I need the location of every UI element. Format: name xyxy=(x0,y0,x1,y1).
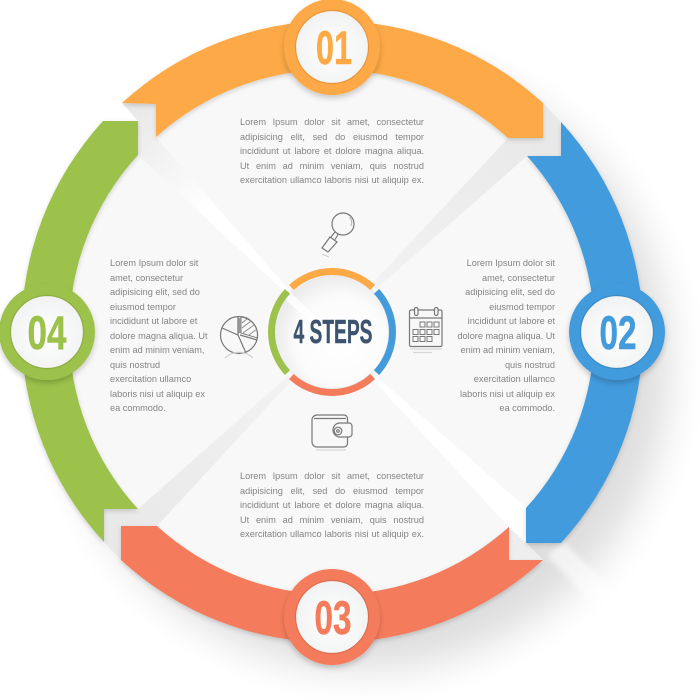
text block: step 2: enim ad minim veniam, xyxy=(461,345,555,355)
text block: step 3: Ut enim ad minim veniam, quis nostrud xyxy=(240,514,424,524)
text block: step 2: ea commodo. xyxy=(499,403,555,413)
icon: calendar xyxy=(410,308,442,352)
text block: step 3 xyxy=(240,471,424,539)
long drop shadow xyxy=(58,58,670,670)
text block: step 1: Lorem Ipsum dolor sit amet, consectetur xyxy=(240,117,424,127)
arrow segment 2: blue xyxy=(526,122,643,543)
text block: step 4: eiusmod tempor xyxy=(110,302,176,312)
badge 04: 04 xyxy=(28,306,66,359)
text block: step 1: adipisicing elit, sed do eiusmod tempor xyxy=(240,132,424,142)
text block: step 4 xyxy=(110,258,208,413)
text block: step 4: ea commodo. xyxy=(110,403,166,413)
text block: step 3: incididunt ut labore et dolore magna aliqua. xyxy=(240,500,424,510)
text block: step 2: eiusmod tempor xyxy=(489,302,555,312)
text block: step 1: Ut enim ad minim veniam, quis nostrud xyxy=(240,160,424,170)
central disc background xyxy=(69,69,595,595)
text block: step 4: adipisicing elit, sed do xyxy=(110,287,200,297)
text block: step 4: enim ad minim veniam, xyxy=(110,345,204,355)
icon: pie chart xyxy=(220,316,258,358)
badge 02: 02 xyxy=(600,306,636,359)
text block: step 1: incididunt ut labore et dolore magna aliqua. xyxy=(240,146,424,156)
arrow segment 3: red xyxy=(121,526,543,643)
badge 01: 01 xyxy=(316,21,352,74)
center circle: 4 STEPS xyxy=(294,313,372,350)
text block: step 3: adipisicing elit, sed do eiusmod tempor xyxy=(240,486,424,496)
text block: step 2: dolore magna aliqua. Ut xyxy=(457,330,555,340)
text block: step 4: exercitation ullamco xyxy=(110,374,191,384)
text block: step 2: laboris nisi ut aliquip ex xyxy=(460,388,555,398)
text block: step 1: exercitation ullamco laboris nisi ut aliquip ex. xyxy=(240,175,424,185)
arrow segment 4: green xyxy=(21,121,138,542)
badge 01 xyxy=(284,0,380,95)
badge 04 xyxy=(0,284,95,380)
center circle xyxy=(271,271,393,393)
text block: step 2: incididunt ut labore et xyxy=(468,316,555,326)
icon: magnifier xyxy=(322,213,354,257)
text block: step 2: adipisicing elit, sed do xyxy=(465,287,555,297)
text block: step 4: dolore magna aliqua. Ut xyxy=(110,330,208,340)
text block: step 4: amet, consectetur xyxy=(110,272,183,282)
text block: step 2: exercitation ullamco xyxy=(474,374,555,384)
text block: step 2 xyxy=(457,258,555,413)
text block: step 2: Lorem Ipsum dolor sit xyxy=(467,258,555,268)
text block: step 4: Lorem Ipsum dolor sit xyxy=(110,258,198,268)
text block: step 2: quis nostrud xyxy=(505,360,555,370)
text block: step 3: exercitation ullamco laboris nisi ut aliquip ex. xyxy=(240,529,424,539)
arrow segment 1: orange xyxy=(122,21,543,138)
text block: step 4: laboris nisi ut aliquip ex xyxy=(110,388,205,398)
diagonal bands xyxy=(104,103,561,560)
icon: wallet xyxy=(312,415,352,450)
text block: step 3: Lorem Ipsum dolor sit amet, consectetur xyxy=(240,471,424,481)
badge 02 xyxy=(569,284,665,380)
text block: step 2: amet, consectetur xyxy=(482,272,555,282)
text block: step 1 xyxy=(240,117,424,185)
badge 03 xyxy=(284,569,380,665)
text block: step 4: quis nostrud xyxy=(110,360,160,370)
badge 03: 03 xyxy=(314,591,352,644)
text block: step 4: incididunt ut labore et xyxy=(110,316,197,326)
